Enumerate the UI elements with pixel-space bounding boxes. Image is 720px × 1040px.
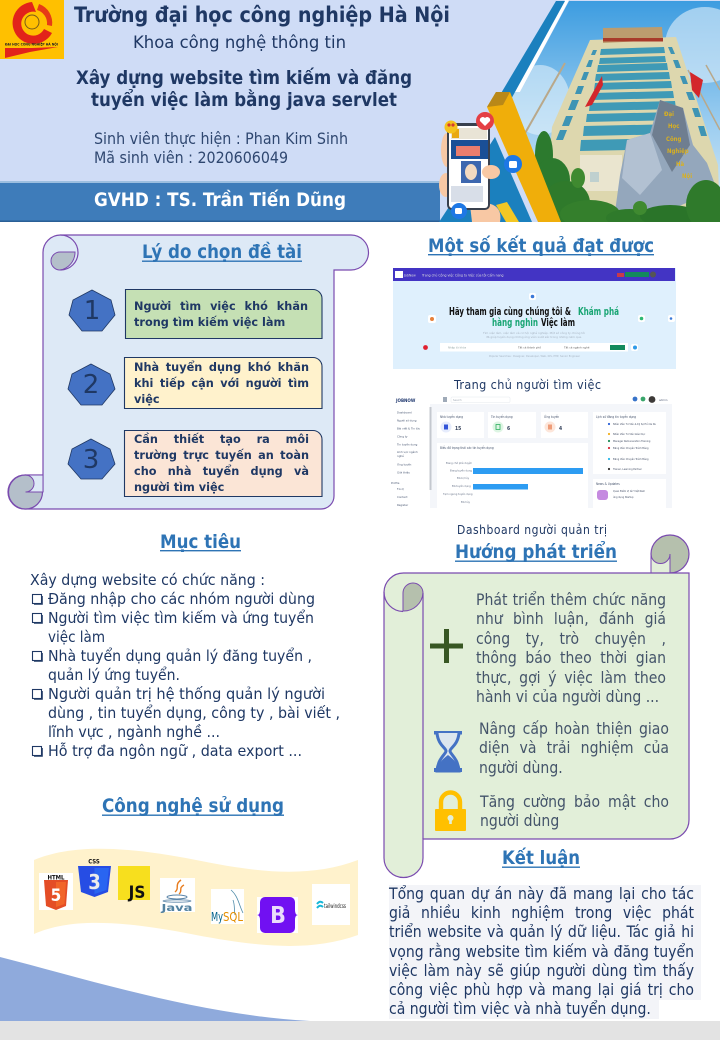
- logo: JavaScript: [118, 866, 150, 903]
- future item 1 text: thực, gợi ý việc làm theo: [476, 669, 666, 687]
- blue diagonal stripe: [497, 1, 565, 112]
- screenshot: admin dashboard: Profile: [391, 481, 400, 485]
- objective 4: [32, 685, 340, 741]
- conclusion text: cả người tìm việc và nhà tuyển dụng.: [389, 1000, 651, 1018]
- logo: Java: Java: [160, 903, 193, 914]
- screenshot: admin dashboard: Register: [397, 503, 409, 507]
- rock monument: Đại: [664, 111, 674, 118]
- reason 2 number: 2: [83, 370, 99, 400]
- conclusion text: vọng rằng website tìm kiếm và đăng tuyển: [389, 943, 694, 961]
- heading: conclusion: Kết luận: [502, 846, 580, 869]
- objective 1: Đăng nhập cho các nhóm người dùng: [48, 590, 315, 608]
- rock monument: Nghiệp: [667, 148, 689, 155]
- screenshot: job seeker home page: Việc làm: [541, 317, 575, 329]
- screenshot: admin dashboard: [391, 394, 672, 508]
- screenshot: admin dashboard: Ứng tuyển: [544, 414, 559, 419]
- heading: future development: Hướng phát triển: [455, 540, 617, 563]
- rock monument: Nội: [682, 173, 692, 180]
- future item 1 text: thông báo theo thời gian: [476, 649, 666, 667]
- screenshot: admin dashboard: Biểu đồ trạng thái các tin tuyển dụng: [440, 445, 494, 450]
- logo: CSS3: 3: [88, 870, 101, 894]
- screenshot: admin dashboard: Tin tuyển dụng: [491, 414, 513, 419]
- future item 2 text: [479, 720, 669, 777]
- reason 3 text: Cần thiết tạo ra môi: [134, 433, 309, 446]
- reason 2 number: [68, 364, 115, 405]
- objective 3: [32, 647, 312, 684]
- screenshot: admin dashboard: Trainer, Learning Partner: [613, 467, 642, 471]
- reason 3 number: 3: [83, 445, 99, 475]
- reason 3 text: cho nhà tuyển dụng và: [134, 465, 309, 478]
- future item 3 text: người dùng: [480, 812, 559, 830]
- reason 1 text: [134, 300, 308, 329]
- trees: [534, 131, 720, 230]
- reason 3 box: [124, 430, 322, 496]
- future item 2 text: Nâng cấp hoàn thiện giao: [479, 720, 669, 738]
- logo: CSS3: CSS: [88, 858, 100, 866]
- project title: Xây dựng website tìm kiếm và đăng: [76, 66, 412, 89]
- logo: HTML5: HTML: [47, 874, 65, 882]
- flagpoles and flags: [525, 62, 720, 134]
- icon: padlock: [435, 792, 466, 831]
- screenshot: admin dashboard: Contact: [397, 495, 408, 499]
- panel: future development scroll: [384, 535, 689, 878]
- heading: objectives: Mục tiêu: [160, 531, 241, 553]
- student info: [94, 129, 348, 167]
- future item 1 text: như bình luận, đánh giá: [476, 610, 666, 628]
- screenshot: job seeker home page: Khám phá: [578, 306, 619, 318]
- screenshot: admin dashboard: ứng dụng Startup: [613, 495, 634, 499]
- logo: HTML5: [39, 873, 73, 910]
- screenshot: admin dashboard: Đã bị hủy: [457, 476, 470, 480]
- screenshot: job seeker home page: Nhập từ khóa: [448, 346, 467, 350]
- logo: CSS3: [78, 858, 111, 897]
- screenshot: admin dashboard: Tạm ngưng tuyển dụng: [443, 491, 473, 496]
- conclusion text: việc làm này sẽ giúp người dùng tìm thấy: [389, 962, 694, 980]
- heading: results: Một số kết quả đạt được: [428, 234, 654, 257]
- screenshot: admin dashboard: Tin tuyển dụng: [397, 442, 418, 446]
- reason 3 text: người tìm việc: [134, 481, 224, 494]
- conclusion text: [388, 885, 701, 1019]
- faculty name: Khoa công nghệ thông tin: [133, 33, 346, 53]
- screenshot: admin dashboard: 4: [559, 426, 562, 432]
- reason 1 text: Người tìm việc khó khăn: [134, 300, 308, 313]
- logo: JavaScript: JS: [128, 883, 145, 903]
- logo: Java: [160, 878, 195, 914]
- reason 1 number: [69, 290, 115, 331]
- screenshot: admin dashboard: Dashboard: [397, 410, 412, 414]
- objective 4: lĩnh vực , ngành nghề ...: [48, 723, 220, 741]
- reason 3 number: [68, 439, 115, 479]
- screenshot: admin dashboard: Lĩnh vực ngành: [397, 450, 418, 454]
- future item 1 text: công ty, trò chuyện ,: [476, 630, 666, 648]
- screenshot: admin dashboard: Đã hủy: [461, 500, 470, 504]
- rock monument: [615, 100, 717, 212]
- screenshot: admin dashboard: Đang chờ phê duyệt: [446, 461, 472, 465]
- bottom decoration wave: [0, 957, 310, 1021]
- screenshot: admin dashboard: Đăng Viên Chuyên Trách Đảng: [613, 446, 649, 450]
- screenshot: admin dashboard: Đã tuyển dụng: [452, 483, 471, 488]
- instructor bar: [0, 181, 440, 222]
- logo: Bootstrap: [257, 897, 298, 933]
- rock monument: Học: [668, 123, 679, 130]
- project title: tuyển việc làm bằng java servlet: [91, 88, 397, 111]
- reason 3 text: [134, 432, 309, 494]
- icon: plus: [430, 629, 463, 663]
- screenshot: job seeker home page: Popular Searches : Designer, Developer, Web, IOS, PHP, Senior Engineer: [489, 354, 581, 358]
- future item 2 text: diện và trải nghiệm của: [479, 739, 669, 757]
- student info: Sinh viên thực hiện : Phan Kim Sinh: [94, 129, 348, 148]
- objective 3: Nhà tuyển dụng quản lý đăng tuyển ,: [48, 647, 312, 665]
- screenshot: admin dashboard: F.A.Q: [397, 487, 404, 491]
- screenshot: job seeker home page: Tất cả thành phố: [518, 346, 541, 350]
- white diagonal separators: [510, 0, 569, 92]
- panel: reasons scroll: [8, 235, 368, 509]
- phone in hand: [439, 112, 522, 222]
- gold diagonal band: [487, 92, 561, 222]
- reason 1 text: trong tìm kiếm việc làm: [134, 316, 285, 329]
- screenshot: admin dashboard: News & Updates: [596, 482, 620, 486]
- screenshot: job seeker home page: Tìm việc làm, việc làm và cơ hội nghề nghiệp. Một số công ty chúng tôi: [483, 331, 585, 335]
- reason 2 text: [134, 360, 309, 406]
- conclusion text: Tổng quan dự án này đã mang lại cho tác: [389, 885, 694, 903]
- screenshot: job seeker home page: Tất cả ngành nghề: [564, 346, 590, 350]
- reason 2 text: Nhà tuyển dụng khó khăn: [134, 361, 309, 374]
- conclusion text: công việc phù hợp và mang lại giá trị cho: [389, 981, 694, 999]
- future item 3 text: [480, 793, 669, 830]
- technology logos ribbon: [34, 849, 358, 946]
- logo: MySQL: [211, 889, 244, 924]
- lower blue triangle: [439, 137, 532, 222]
- project title: [76, 66, 412, 111]
- objective 5: Hỗ trợ đa ngôn ngữ , data export ...: [48, 742, 302, 760]
- screenshot: job seeker home page: hàng nghìn: [492, 317, 538, 329]
- reason 2 text: việc: [134, 393, 160, 406]
- screenshot: job seeker home page: Trang chủ Công việc Công ty Việc của tôi Cẩm nang: [422, 272, 504, 278]
- rock monument: Công: [666, 136, 682, 143]
- future item 1 text: [476, 591, 666, 706]
- objective 2: Người tìm việc tìm kiếm và ứng tuyển: [48, 609, 314, 627]
- reason 2 text: khi tiếp cận với người tìm: [134, 377, 309, 390]
- future item 3 text: Tăng cường bảo mật cho: [480, 793, 669, 811]
- school logo: ĐẠI HỌC CÔNG NGHIỆP HÀ NỘI: [5, 42, 58, 46]
- screenshot: admin dashboard: Ứng tuyển: [397, 462, 412, 466]
- screenshot: admin dashboard: admin: [659, 398, 668, 402]
- screenshot: job seeker home page: [393, 268, 676, 369]
- caption: dashboard: Dashboard người quản trị: [457, 523, 607, 537]
- screenshot: admin dashboard: 15: [455, 426, 461, 432]
- logo: Tailwind CSS: tailwindcss: [324, 903, 346, 910]
- objectives list: [30, 571, 340, 760]
- heading: technologies: Công nghệ sử dụng: [102, 795, 284, 817]
- footer band: [0, 1021, 720, 1040]
- screenshot: admin dashboard: 6: [507, 426, 510, 432]
- screenshot: job seeker home page: JobNow: [403, 274, 416, 278]
- logo: Bootstrap: B: [270, 903, 286, 929]
- school logo: [0, 0, 64, 59]
- student info: Mã sinh viên : 2020606049: [94, 148, 288, 167]
- screenshot: admin dashboard: Đang tuyển dụng: [450, 468, 472, 472]
- instructor bar: GVHD : TS. Trần Tiến Dũng: [94, 188, 346, 211]
- objective 4: Người quản trị hệ thống quản lý người: [48, 685, 325, 703]
- future item 2 text: người dùng.: [479, 759, 563, 777]
- university name: Trường đại học công nghiệp Hà Nội: [74, 3, 450, 27]
- heading: reasons: Lý do chọn đề tài: [142, 240, 302, 263]
- objective 3: quản lý ứng tuyển.: [48, 666, 180, 684]
- screenshot: admin dashboard: JOBNOW: [395, 398, 416, 404]
- objectives list: Xây dựng website có chức năng :: [30, 571, 265, 589]
- screenshot: admin dashboard: Đăng Viên Chuyên Trách Đảng: [613, 457, 649, 461]
- logo: MySQL: SQL: [223, 910, 243, 924]
- logo: MySQL: My: [211, 910, 223, 924]
- icon: hourglass: [434, 731, 462, 772]
- objective 2: việc làm: [48, 628, 105, 646]
- reason 3 text: trường trực tuyến an toàn: [134, 449, 309, 462]
- objective 2: [32, 609, 314, 646]
- screenshot: admin dashboard: Search: [453, 398, 462, 402]
- reason 1 number: 1: [84, 296, 100, 326]
- future item 1 text: Phát triển thêm chức năng: [476, 591, 666, 609]
- screenshot: admin dashboard: Giới thiệu: [397, 470, 410, 474]
- screenshot: admin dashboard: Lịch sử đăng tin tuyển dụng: [596, 414, 636, 419]
- rock monument: Hà: [676, 161, 685, 168]
- screenshot: admin dashboard: Nhân Viên Tư Vấn Giáo Dục: [613, 432, 646, 436]
- logo: Tailwind CSS: [312, 884, 350, 925]
- screenshot: admin dashboard: Manager Remuneration Training: [613, 439, 651, 443]
- conclusion text: triển website và quản lý dữ liệu. Tác giả hi: [389, 923, 694, 941]
- caption: home page: Trang chủ người tìm việc: [453, 377, 601, 392]
- screenshot: admin dashboard: Quan Điểm Vị Gì? Việt Nam: [613, 488, 646, 493]
- screenshot: admin dashboard: Người sử dụng: [397, 418, 417, 422]
- screenshot: admin dashboard: nghề: [397, 454, 404, 458]
- screenshot: admin dashboard: Nhân Viên Tư Vấn & Kỹ Sự Hồi Xe Du: [613, 422, 657, 426]
- screenshot: admin dashboard: Nhà tuyển dụng: [440, 414, 463, 419]
- screenshot: job seeker home page: đã giúp tuyển dụng những ứng viên xuất sắc trong những năm qua.: [486, 334, 582, 339]
- screenshot: admin dashboard: Công ty: [397, 434, 408, 438]
- campus photo: [439, 0, 720, 230]
- screenshot: job seeker home page: Hãy tham gia cùng chúng tôi &: [449, 306, 571, 318]
- objective 4: dùng , tin tuyển dụng, công ty , bài viết ,: [48, 704, 340, 722]
- logo: HTML5: 5: [51, 886, 61, 906]
- conclusion text: giả nhiều kinh nghiệm trong việc phát: [389, 904, 694, 922]
- future item 1 text: hành vi của người dùng ...: [476, 688, 659, 706]
- screenshot: admin dashboard: Bài viết & Tin tức: [397, 426, 421, 430]
- reason 1 box: [126, 290, 322, 338]
- reason 2 box: [124, 358, 322, 408]
